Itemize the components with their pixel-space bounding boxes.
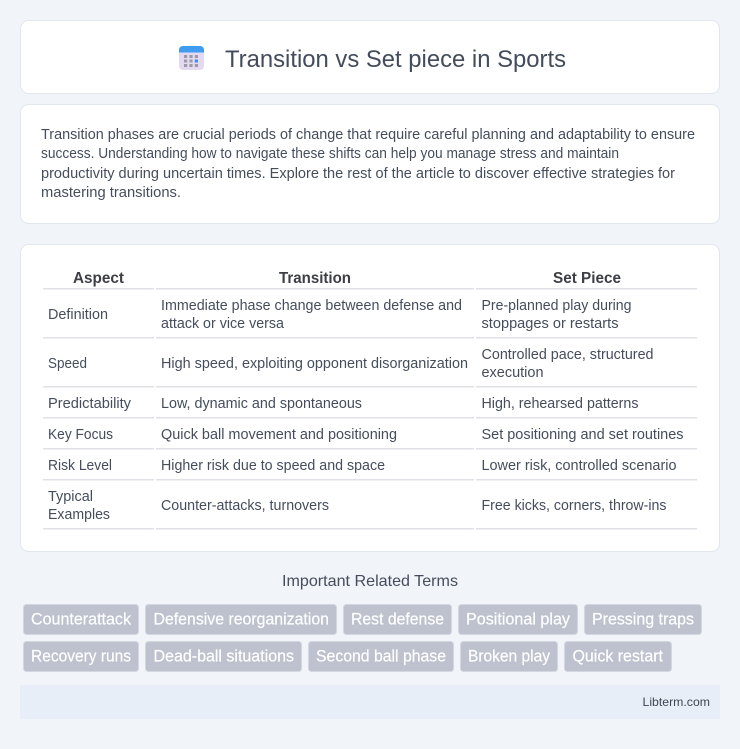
row: predictability: Low, dynamic and spontaneous: [161, 396, 362, 412]
footer: [20, 685, 720, 719]
intro paragraph: productivity during uncertain times. Explore the rest of the article to discover effective strategies for: [41, 166, 675, 182]
panel: title card: [20, 20, 720, 94]
heading: important related terms: Important Related Terms: [282, 573, 458, 590]
row: definition: stoppages or restarts: [482, 316, 618, 332]
intro paragraph: success. Understanding how to navigate these shifts can help you manage stress and maintain: [41, 146, 619, 162]
row: risk level: [48, 458, 676, 474]
row: speed: Controlled pace, structured: [482, 347, 654, 363]
panel: intro text: [20, 104, 720, 224]
table header: Aspect: [73, 270, 125, 287]
row: typical examples: Examples: [48, 507, 110, 523]
row: speed: [48, 347, 654, 381]
table header: [73, 270, 621, 287]
row: speed: Speed: [48, 356, 87, 372]
title: Transition vs Set piece in Sports: [225, 46, 566, 73]
intro paragraph: [41, 127, 695, 201]
tag: Dead-ball situations: [146, 642, 302, 672]
icon: calendar: [179, 46, 204, 70]
row: key focus: Key Focus: [48, 427, 113, 443]
row: definition: Immediate phase change between defense and: [161, 298, 462, 314]
row: definition: attack or vice versa: [161, 316, 285, 332]
tag: Recovery runs: Recovery runs: [31, 648, 131, 666]
tag: Quick restart: Quick restart: [572, 648, 663, 666]
tag: Pressing traps: [584, 604, 702, 634]
table header: Transition: [279, 270, 351, 287]
tag: Positional play: Positional play: [466, 610, 571, 628]
row: speed: High speed, exploiting opponent disorganization: [161, 356, 468, 372]
row: definition: Definition: [48, 307, 108, 323]
intro paragraph: Transition phases are crucial periods of change that require careful planning and adaptability to ensure: [41, 127, 695, 143]
tag: Recovery runs: [24, 642, 138, 672]
row: risk level: Higher risk due to speed and space: [161, 458, 385, 474]
row: key focus: [48, 427, 684, 443]
row: predictability: [48, 396, 638, 412]
row: key focus: Quick ball movement and positioning: [161, 427, 397, 443]
tag: Defensive reorganization: [146, 604, 336, 634]
row: typical examples: Free kicks, corners, throw-ins: [482, 498, 666, 514]
related term tags: [24, 604, 702, 672]
panel: comparison table: [20, 244, 720, 552]
row: definition: [48, 298, 632, 332]
tag: Quick restart: [564, 642, 672, 672]
tag: Defensive reorganization: Defensive reorganization: [154, 610, 329, 628]
row: typical examples: [48, 489, 666, 523]
tag: Dead-ball situations: Dead-ball situations: [154, 648, 294, 666]
row: typical examples: Counter-attacks, turnovers: [161, 498, 329, 514]
tag: Counterattack: [24, 604, 138, 634]
table header: Set Piece: [553, 270, 621, 287]
tag: Broken play: [460, 642, 558, 672]
tag: Positional play: [458, 604, 578, 634]
row: risk level: Lower risk, controlled scenario: [482, 458, 676, 474]
row: predictability: High, rehearsed patterns: [482, 396, 638, 412]
row: definition: Pre-planned play during: [482, 298, 632, 314]
tag: Pressing traps: Pressing traps: [592, 610, 694, 628]
intro paragraph: mastering transitions.: [41, 185, 181, 201]
tag: Counterattack: Counterattack: [31, 610, 132, 628]
tag: Broken play: Broken play: [468, 648, 551, 666]
tag: Second ball phase: [308, 642, 454, 672]
tag: Rest defense: [344, 604, 452, 634]
tag: Second ball phase: Second ball phase: [316, 648, 446, 666]
tag: Rest defense: Rest defense: [351, 610, 444, 628]
row: typical examples: Typical: [48, 489, 93, 505]
row: key focus: Set positioning and set routines: [482, 427, 684, 443]
footer: Libterm.com: [642, 695, 710, 709]
row: predictability: Predictability: [48, 396, 132, 412]
row: risk level: Risk Level: [48, 458, 112, 474]
row: speed: execution: [482, 365, 544, 381]
